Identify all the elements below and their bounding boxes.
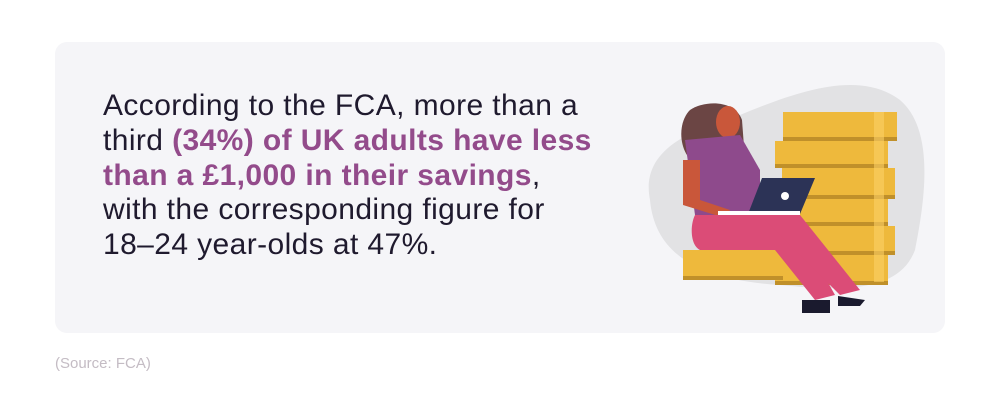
icon: coin stack <box>683 112 897 285</box>
blob background <box>649 85 924 288</box>
text block: statistic: 18–24 year-olds at 47%. <box>103 228 437 261</box>
text block: statistic <box>103 89 592 261</box>
source note: (Source: FCA) <box>55 355 151 372</box>
text block: statistic: with the corresponding figure for <box>103 193 545 226</box>
text block: statistic: than a £1,000 in their savings, <box>103 159 541 192</box>
figure: woman <box>681 103 865 313</box>
text block: statistic: According to the FCA, more than a <box>103 89 578 122</box>
panel: card <box>55 42 945 333</box>
text block: statistic: third (34%) of UK adults have less <box>103 124 592 157</box>
